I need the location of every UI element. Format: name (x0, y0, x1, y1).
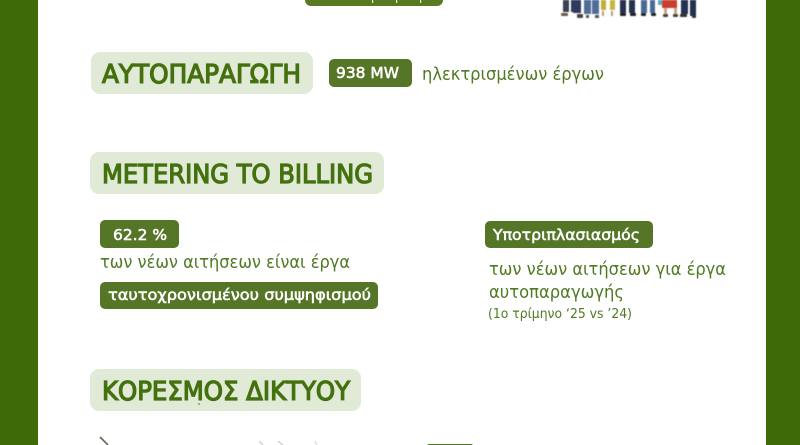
heading pill: self-production (91, 52, 313, 94)
section: self-production (91, 52, 604, 94)
badge: net billing (100, 282, 378, 309)
left sidebar (0, 0, 38, 445)
stat block: 62.2 percent (100, 220, 378, 309)
text: share of new applications: των νέων αιτήσεων είναι έργα (100, 252, 350, 273)
illustration: row of people, legs only (561, 0, 696, 18)
heading pill: grid saturation (90, 369, 361, 411)
text: new self-production applications (489, 259, 726, 303)
bottom cropped badge (427, 444, 473, 445)
badge: 62.2 %: 62.2 % (113, 226, 167, 244)
heading pill: self-production: ΑΥΤΟΠΑΡΑΓΩΓΗ (102, 60, 301, 90)
right sidebar (766, 0, 800, 445)
heading pill: metering to billing: METERING TO BILLING (102, 160, 373, 190)
heading pill: grid saturation: ΚΟΡΕΣΜΟΣ ΔΙΚΤΥΟΥ (102, 377, 350, 407)
illustration: cropped plant tips (100, 437, 317, 445)
text: electrified projects: ηλεκτρισμένων έργων (422, 64, 604, 85)
badge: 938 MW (329, 59, 412, 87)
text: new self-production applications: των νέων αιτήσεων για έργα (489, 259, 726, 280)
text: new self-production applications: αυτοπαραγωγής (489, 282, 624, 303)
badge: 938 MW: 938 MW (336, 64, 399, 82)
stat block: threefold decrease (485, 221, 726, 322)
badge: threefold decrease (485, 221, 653, 248)
badge: 62.2 % (100, 220, 179, 248)
badge: threefold decrease: Υποτριπλασιασμός (492, 226, 640, 244)
note: quarter comparison: (1ο τρίμηνο ‘25 vs ’24) (488, 307, 632, 322)
top cropped pill (305, 0, 443, 6)
badge: net billing: ταυτοχρονισμένου συμψηφισμού (108, 286, 371, 304)
heading pill: metering to billing (90, 152, 384, 194)
